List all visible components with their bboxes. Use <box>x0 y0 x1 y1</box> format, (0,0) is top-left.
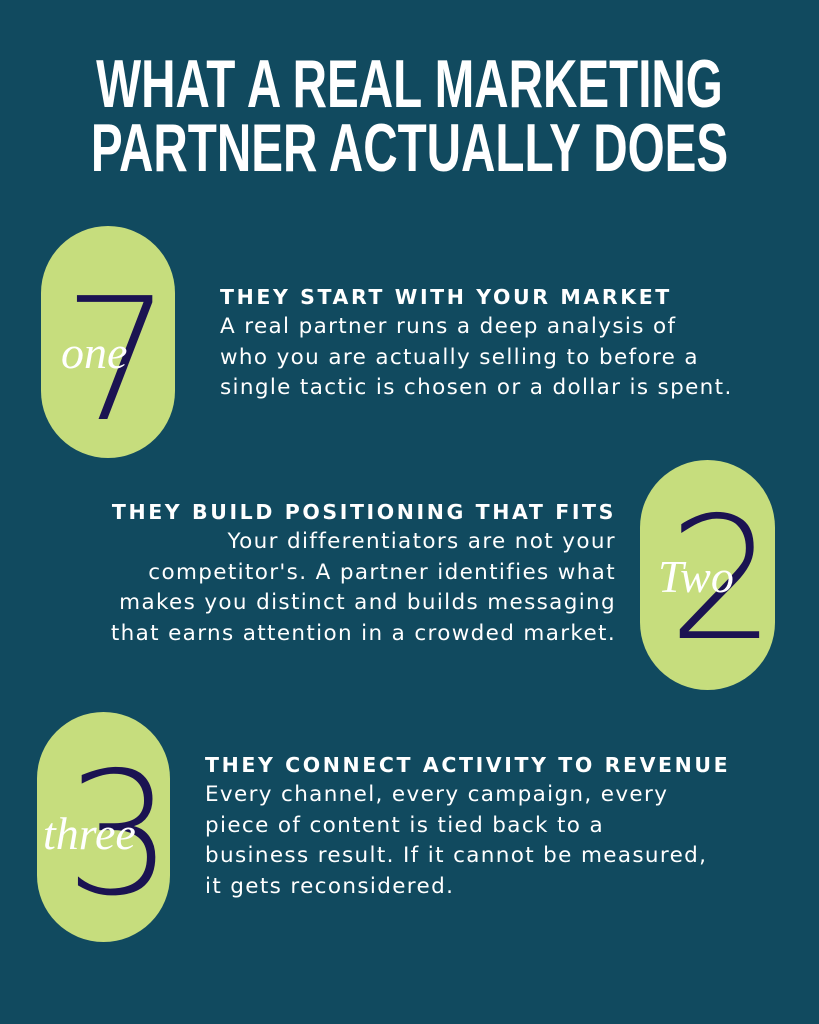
text block 3: piece of content is tied back to a <box>205 812 604 838</box>
pill: two <box>640 460 775 690</box>
text block 1: who you are actually selling to before a <box>220 344 699 370</box>
text block 2 <box>111 500 616 646</box>
pill: one <box>41 226 175 458</box>
text block 3: business result. If it cannot be measured, <box>205 843 707 868</box>
text block 3 <box>205 753 730 898</box>
text block 3: THEY CONNECT ACTIVITY TO REVENUE <box>205 753 730 777</box>
pill: three <box>37 712 170 942</box>
text block 1: single tactic is chosen or a dollar is spent. <box>220 375 733 400</box>
script: two: Two <box>658 551 734 602</box>
text block 3: it gets reconsidered. <box>205 874 454 898</box>
text block 2: competitor's. A partner identifies what <box>148 560 616 584</box>
number 1: 7 <box>63 262 171 460</box>
text block 1: THEY START WITH YOUR MARKET <box>220 285 672 309</box>
script: one: one <box>61 327 127 378</box>
text block 1: A real partner runs a deep analysis of <box>220 314 676 339</box>
number 2: 2 <box>668 481 776 679</box>
text block 2: that earns attention in a crowded market. <box>111 620 616 646</box>
text block 3: Every channel, every campaign, every <box>205 782 668 807</box>
text block 2: THEY BUILD POSITIONING THAT FITS <box>112 500 616 524</box>
script: three: three <box>43 808 136 859</box>
title: PARTNER ACTUALLY DOES <box>91 110 728 186</box>
text block 1 <box>220 285 733 400</box>
text block 2: makes you distinct and builds messaging <box>119 590 616 615</box>
number 3: 3 <box>65 736 173 934</box>
text block 2: Your differentiators are not your <box>227 529 616 554</box>
title <box>91 46 728 186</box>
title: WHAT A REAL MARKETING <box>96 46 723 122</box>
